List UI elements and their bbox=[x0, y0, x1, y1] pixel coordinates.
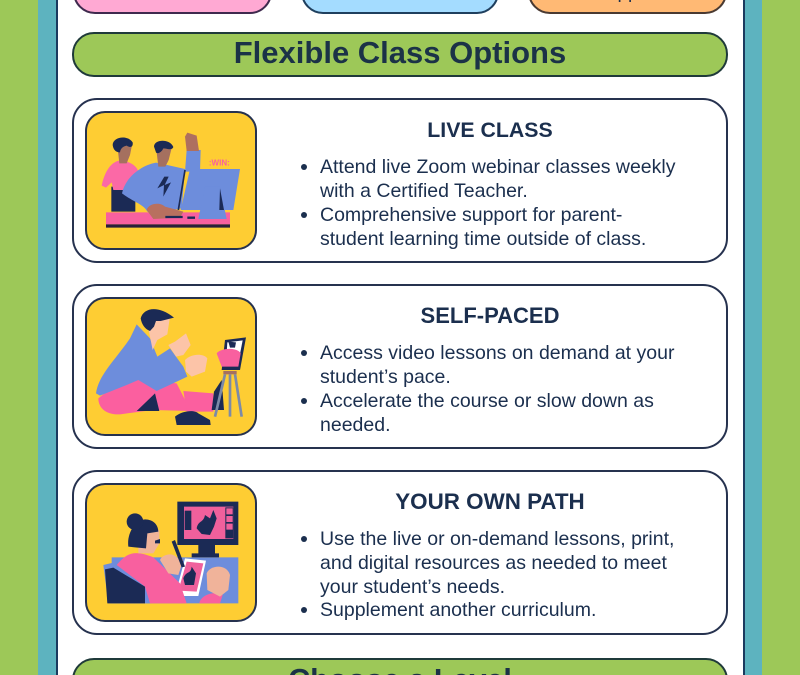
bullet list: self-paced: needed. bbox=[320, 414, 390, 436]
illustration: designer with tablet and monitor bbox=[103, 502, 238, 604]
heading: live class: LIVE CLASS bbox=[427, 118, 553, 142]
bullet list: your own path: Use the live or on-demand lessons, print, bbox=[320, 528, 674, 550]
bullet list: live class: Comprehensive support for parent- bbox=[320, 204, 622, 226]
bullet list: your own path: and digital resources as needed to meet bbox=[320, 552, 667, 574]
bullet list: self-paced: Access video lessons on demand at your bbox=[320, 342, 674, 364]
bullet list: live class: with a Certified Teacher. bbox=[320, 180, 528, 202]
heading pill: Flexible Class Options bbox=[72, 32, 728, 77]
bullet list: self-paced bbox=[301, 342, 674, 436]
heading: Flexible Class Options: Flexible Class Options bbox=[234, 35, 566, 70]
bullet list: live class: student learning time outside of class. bbox=[320, 228, 646, 250]
panel: your own path bbox=[72, 470, 728, 635]
bullet list: your own path: Supplement another curriculum. bbox=[320, 599, 596, 621]
bullet list: self-paced: Accelerate the course or slow down as bbox=[320, 390, 654, 412]
image tile: your own path bbox=[85, 483, 257, 622]
panel: live class bbox=[72, 98, 728, 263]
panel: self-paced bbox=[72, 284, 728, 449]
blue pill, top bbox=[301, 0, 499, 14]
bullet list: your own path: your student’s needs. bbox=[320, 576, 505, 598]
image tile: live class bbox=[85, 111, 257, 250]
illustration: two people at a computer bbox=[102, 132, 240, 228]
heading pill: Choose a Level bbox=[72, 658, 728, 675]
orange pill, top bbox=[528, 0, 727, 14]
bullet list: your own path bbox=[301, 528, 674, 621]
bullet list: live class bbox=[301, 156, 676, 250]
pink pill, top bbox=[73, 0, 272, 14]
illustration: two people at a computer: :WIN: bbox=[209, 158, 230, 167]
image tile: self-paced bbox=[85, 297, 257, 436]
heading: your own path: YOUR OWN PATH bbox=[395, 489, 585, 514]
heading: self-paced: SELF-PACED bbox=[421, 303, 559, 328]
bullet list: self-paced: student’s pace. bbox=[320, 366, 451, 388]
bullet list: live class: Attend live Zoom webinar classes weekly bbox=[320, 156, 676, 178]
illustration: person filming with a tripod camera bbox=[96, 309, 246, 425]
